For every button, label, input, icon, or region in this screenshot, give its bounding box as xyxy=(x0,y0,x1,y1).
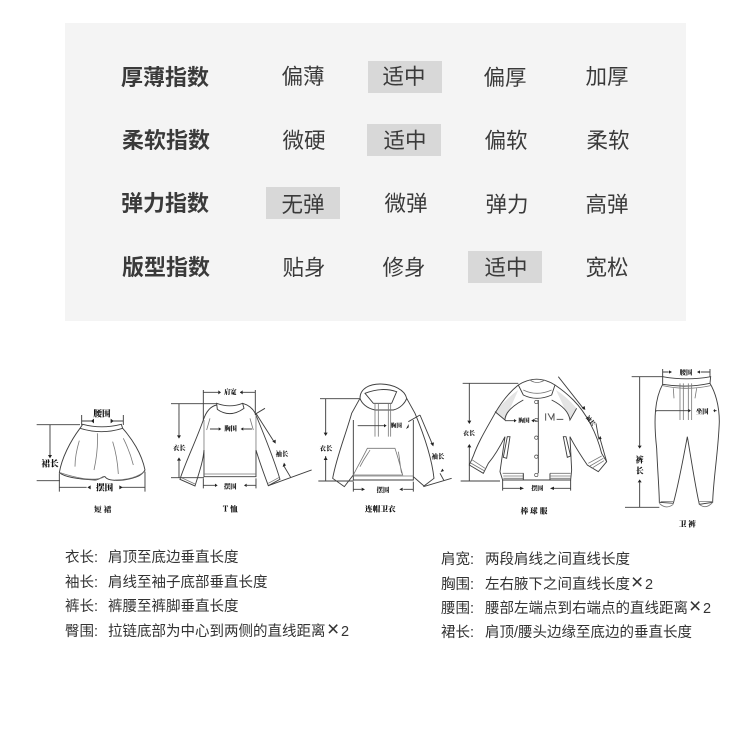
row: fit index: 适中 xyxy=(484,256,528,280)
diagram: skirt: 腰围 xyxy=(93,407,111,419)
text block: measurement notes left: 裤腰至裤脚垂直长度 xyxy=(108,598,238,615)
text block: measurement notes left: × xyxy=(327,618,339,641)
text block: measurement notes right: 胸围: xyxy=(441,577,474,593)
text block: measurement notes left: 袖长: xyxy=(65,575,98,591)
diagram: skirt: 短 裙 xyxy=(94,504,112,515)
row: softness index: 柔软 xyxy=(586,129,630,153)
text block: measurement notes left xyxy=(65,549,349,641)
text block: measurement notes right: 2 xyxy=(645,577,653,593)
diagram: long sleeve T-shirt xyxy=(171,387,312,514)
text block: measurement notes right: 左右腋下之间直线长度 xyxy=(485,576,630,593)
row: elasticity index: 高弹 xyxy=(585,193,629,217)
diagram: hoodie: 连帽卫衣 xyxy=(365,503,396,514)
row: thickness index: 加厚 xyxy=(585,65,629,89)
row: thickness index: 偏薄 xyxy=(281,65,325,89)
diagram: baseball jacket: 衣长 xyxy=(463,428,475,437)
text block: measurement notes left: 肩顶至底边垂直长度 xyxy=(108,549,238,566)
diagram: long sleeve T-shirt: 摆围 xyxy=(224,481,237,490)
diagram: baseball jacket: 袖长 xyxy=(584,413,598,428)
row: elasticity index: 无弹 xyxy=(281,193,325,217)
row: fit index: 版型指数 xyxy=(122,255,210,280)
text block: measurement notes right: 肩宽: xyxy=(441,552,474,568)
text block: measurement notes left: 肩线至袖子底部垂直长度 xyxy=(108,574,268,591)
diagram: hoodie: 摆围 xyxy=(377,485,390,494)
diagram: hoodie xyxy=(318,384,452,514)
diagram: sweatpants: 腰围 xyxy=(680,368,693,377)
diagram: long sleeve T-shirt: 袖长 xyxy=(276,449,289,458)
row: elasticity index: 弹力 xyxy=(485,193,529,217)
text block: measurement notes left: 2 xyxy=(341,624,349,640)
diagram: long sleeve T-shirt: 衣长 xyxy=(173,443,186,452)
diagram: long sleeve T-shirt: 胸围 xyxy=(224,424,238,433)
row: softness index: 微硬 xyxy=(282,129,326,153)
diagram: hoodie: 袖长 xyxy=(432,452,445,461)
row: softness index: 适中 xyxy=(383,129,427,153)
row: softness index xyxy=(122,124,630,156)
diagram: sweatpants: 长 xyxy=(636,466,644,477)
diagram: sweatpants: 裤 xyxy=(636,454,644,465)
text block: measurement notes left: 臀围: xyxy=(65,624,98,640)
row: thickness index: 偏厚 xyxy=(483,66,527,90)
row: thickness index: 厚薄指数 xyxy=(121,65,209,90)
row: elasticity index xyxy=(121,187,629,219)
diagram: baseball jacket xyxy=(461,377,607,516)
text block: measurement notes right: 两段肩线之间直线长度 xyxy=(485,551,630,568)
diagram: sweatpants: 坐围 xyxy=(696,406,709,415)
text block: measurement notes left: 裤长: xyxy=(65,599,98,615)
row: fit index: 贴身 xyxy=(282,256,326,280)
row: fit index: 修身 xyxy=(382,256,426,280)
diagram: hoodie: 衣长 xyxy=(320,443,333,452)
diagram: skirt: 裙长 xyxy=(41,458,59,470)
row: softness index: 柔软指数 xyxy=(122,128,210,153)
row: elasticity index: 微弹 xyxy=(384,192,428,216)
text block: measurement notes right xyxy=(441,551,711,641)
diagram: hoodie: 胸围 xyxy=(391,421,402,430)
diagram: sweatpants xyxy=(625,368,719,529)
text block: measurement notes right: 2 xyxy=(703,601,711,617)
diagram: long sleeve T-shirt: 肩宽 xyxy=(224,387,237,396)
row: thickness index: 适中 xyxy=(382,65,426,89)
row: elasticity index: 弹力指数 xyxy=(121,191,209,216)
diagram: baseball jacket: 胸围 xyxy=(518,415,530,424)
diagram: skirt xyxy=(37,407,145,515)
text block: measurement notes right: 腰围: xyxy=(441,601,474,617)
diagram: long sleeve T-shirt: T 恤 xyxy=(223,503,238,514)
row: softness index: 偏软 xyxy=(484,129,528,153)
diagram: baseball jacket: 摆围 xyxy=(531,483,543,492)
text block: measurement notes right: 肩顶/腰头边缘至底边的垂直长度 xyxy=(485,624,692,641)
text block: measurement notes right: × xyxy=(631,571,643,594)
row: fit index: 宽松 xyxy=(585,256,629,280)
row: fit index xyxy=(122,251,629,283)
diagram: skirt: 摆围 xyxy=(96,482,114,494)
text block: measurement notes left: 衣长: xyxy=(65,550,98,566)
text block: measurement notes right: 腰部左端点到右端点的直线距离 xyxy=(485,600,688,617)
text block: measurement notes left: 拉链底部为中心到两侧的直线距离 xyxy=(108,623,326,640)
text block: measurement notes right: × xyxy=(689,595,701,618)
text block: measurement notes right: 裙长: xyxy=(441,625,474,641)
panel: index table xyxy=(65,23,686,321)
row: thickness index xyxy=(121,61,629,93)
diagram: baseball jacket: 棒 球 服 xyxy=(521,505,548,516)
diagram: sweatpants: 卫 裤 xyxy=(679,518,696,529)
